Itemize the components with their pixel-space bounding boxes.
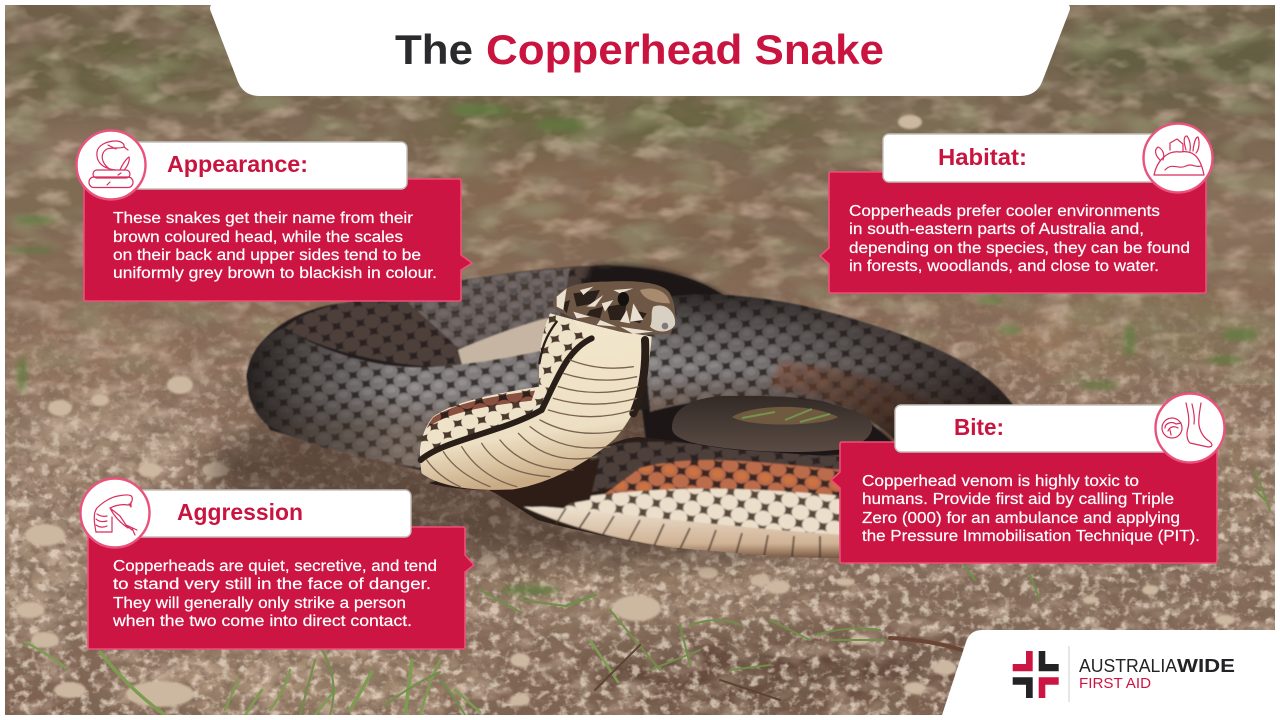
heading: bite: Bite: xyxy=(954,414,1004,440)
heading: habitat: Habitat: xyxy=(938,144,1027,170)
text: habitat body: depending on the species, they can be found xyxy=(849,240,1190,257)
snake small inner coil xyxy=(672,396,872,452)
heading: aggression: Aggression xyxy=(177,499,303,525)
logo text: AUSTRALIA xyxy=(1079,655,1178,676)
icon: striking snake head xyxy=(80,478,150,548)
text: appearance body: uniformly grey brown to blackish in colour. xyxy=(113,265,437,282)
panel: appearance xyxy=(76,130,472,301)
head xyxy=(553,281,675,335)
logo text: FIRST AID xyxy=(1079,675,1151,692)
text: bite body: Zero (000) for an ambulance and applying xyxy=(862,510,1180,527)
neck cream scales strip xyxy=(420,313,587,460)
logo mark: cross xyxy=(1013,651,1059,698)
logo text xyxy=(1079,655,1235,692)
text: habitat body: Copperheads prefer cooler environments xyxy=(849,203,1160,220)
heading: appearance: Appearance: xyxy=(167,151,308,177)
snake neck and head xyxy=(420,281,675,490)
snake shadow xyxy=(210,378,990,562)
snake illustration xyxy=(210,265,1013,565)
text: habitat body: in south-eastern parts of Australia and, xyxy=(849,221,1144,238)
logo text: WIDE xyxy=(1177,655,1235,676)
text: appearance body: These snakes get their name from their xyxy=(113,210,413,227)
icon: bitten foot xyxy=(1156,394,1224,462)
neck dark stripes xyxy=(421,322,645,460)
text: appearance body: on their back and upper sides tend to be xyxy=(113,247,421,264)
snake left body band xyxy=(247,328,550,468)
text: aggression body: Copperheads are quiet, secretive, and tend xyxy=(113,558,437,575)
panel: bite xyxy=(831,394,1224,563)
title banner xyxy=(210,5,1070,96)
text: aggression body: to stand very still in the face of danger. xyxy=(113,576,431,593)
text: appearance body xyxy=(113,210,437,282)
text: bite body: the Pressure Immobilisation Technique (PIT). xyxy=(862,528,1200,545)
snake back dark coil xyxy=(247,265,900,470)
panel: aggression xyxy=(80,478,474,649)
neck copper upper scales xyxy=(427,391,535,428)
icon: coiled snake xyxy=(76,130,146,200)
panel: habitat xyxy=(820,124,1212,293)
neck ribs xyxy=(427,360,638,487)
logo panel xyxy=(942,630,1275,715)
text: bite body: Copperhead venom is highly toxic to xyxy=(862,473,1139,490)
text: bite body: humans. Provide first aid by calling Triple xyxy=(862,491,1174,508)
text: aggression body: They will generally only strike a person xyxy=(113,595,406,612)
text: aggression body: when the two come into direct contact. xyxy=(112,613,412,630)
snake lower body xyxy=(430,437,840,558)
text: aggression body xyxy=(112,558,437,630)
text: appearance body: brown coloured head, while the scales xyxy=(113,229,403,246)
text: habitat body: in forests, woodlands, and close to water. xyxy=(849,258,1159,275)
title text: The xyxy=(395,26,473,73)
neck belly xyxy=(420,313,652,490)
snake right body band xyxy=(640,294,1013,440)
text: habitat body xyxy=(849,203,1190,275)
title text: Copperhead Snake xyxy=(486,26,884,73)
icon: habitat hill xyxy=(1144,124,1212,192)
text: bite body xyxy=(862,473,1200,545)
